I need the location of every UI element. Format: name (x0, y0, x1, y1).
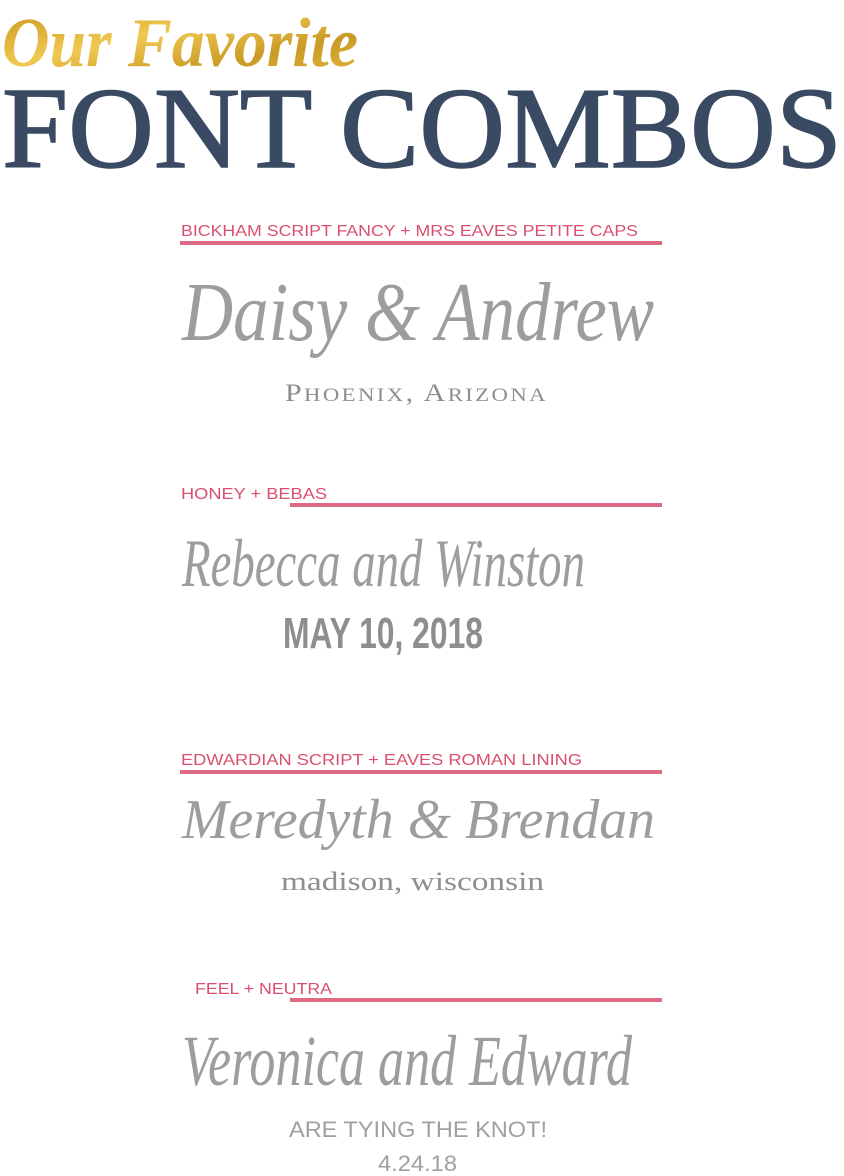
combo 4: Feel + Neutra (182, 981, 662, 1176)
combo 2: Honey + Bebas (181, 486, 662, 658)
date: May 10, 2018: MAY 10, 2018 (283, 609, 483, 658)
label: combo 1: BICKHAM SCRIPT FANCY + MRS EAVES PETITE CAPS (181, 223, 638, 240)
combo 3: Edwardian + Eaves (180, 752, 662, 896)
location: Phoenix, Arizona: PHOENIX , A RIZONA (285, 380, 548, 407)
script names: Meredyth & Brendan: Meredyth & Brendan (181, 789, 655, 851)
title: Our Favorite: Our Favorite (2, 5, 358, 82)
label: combo 4: FEEL + NEUTRA (195, 981, 332, 998)
script names: Veronica and Edward: Veronica and Edward (182, 1021, 633, 1101)
date: 4.24.18: 4.24.18 (378, 1151, 457, 1176)
label: combo 3: EDWARDIAN SCRIPT + EAVES ROMAN LINING (181, 752, 582, 769)
title: FONT COMBOS: FONT COMBOS (2, 65, 842, 193)
combo 1: Bickham + Mrs Eaves (180, 223, 662, 407)
label: combo 2: HONEY + BEBAS (181, 486, 327, 503)
location: madison, wisconsin: madison, wisconsin (281, 867, 544, 896)
script names: Daisy & Andrew: Daisy & Andrew (181, 266, 654, 359)
tagline: are tying the knot: ARE TYING THE KNOT! (289, 1117, 547, 1142)
script names: Rebecca and Winston: Rebecca and Winston (181, 525, 585, 601)
